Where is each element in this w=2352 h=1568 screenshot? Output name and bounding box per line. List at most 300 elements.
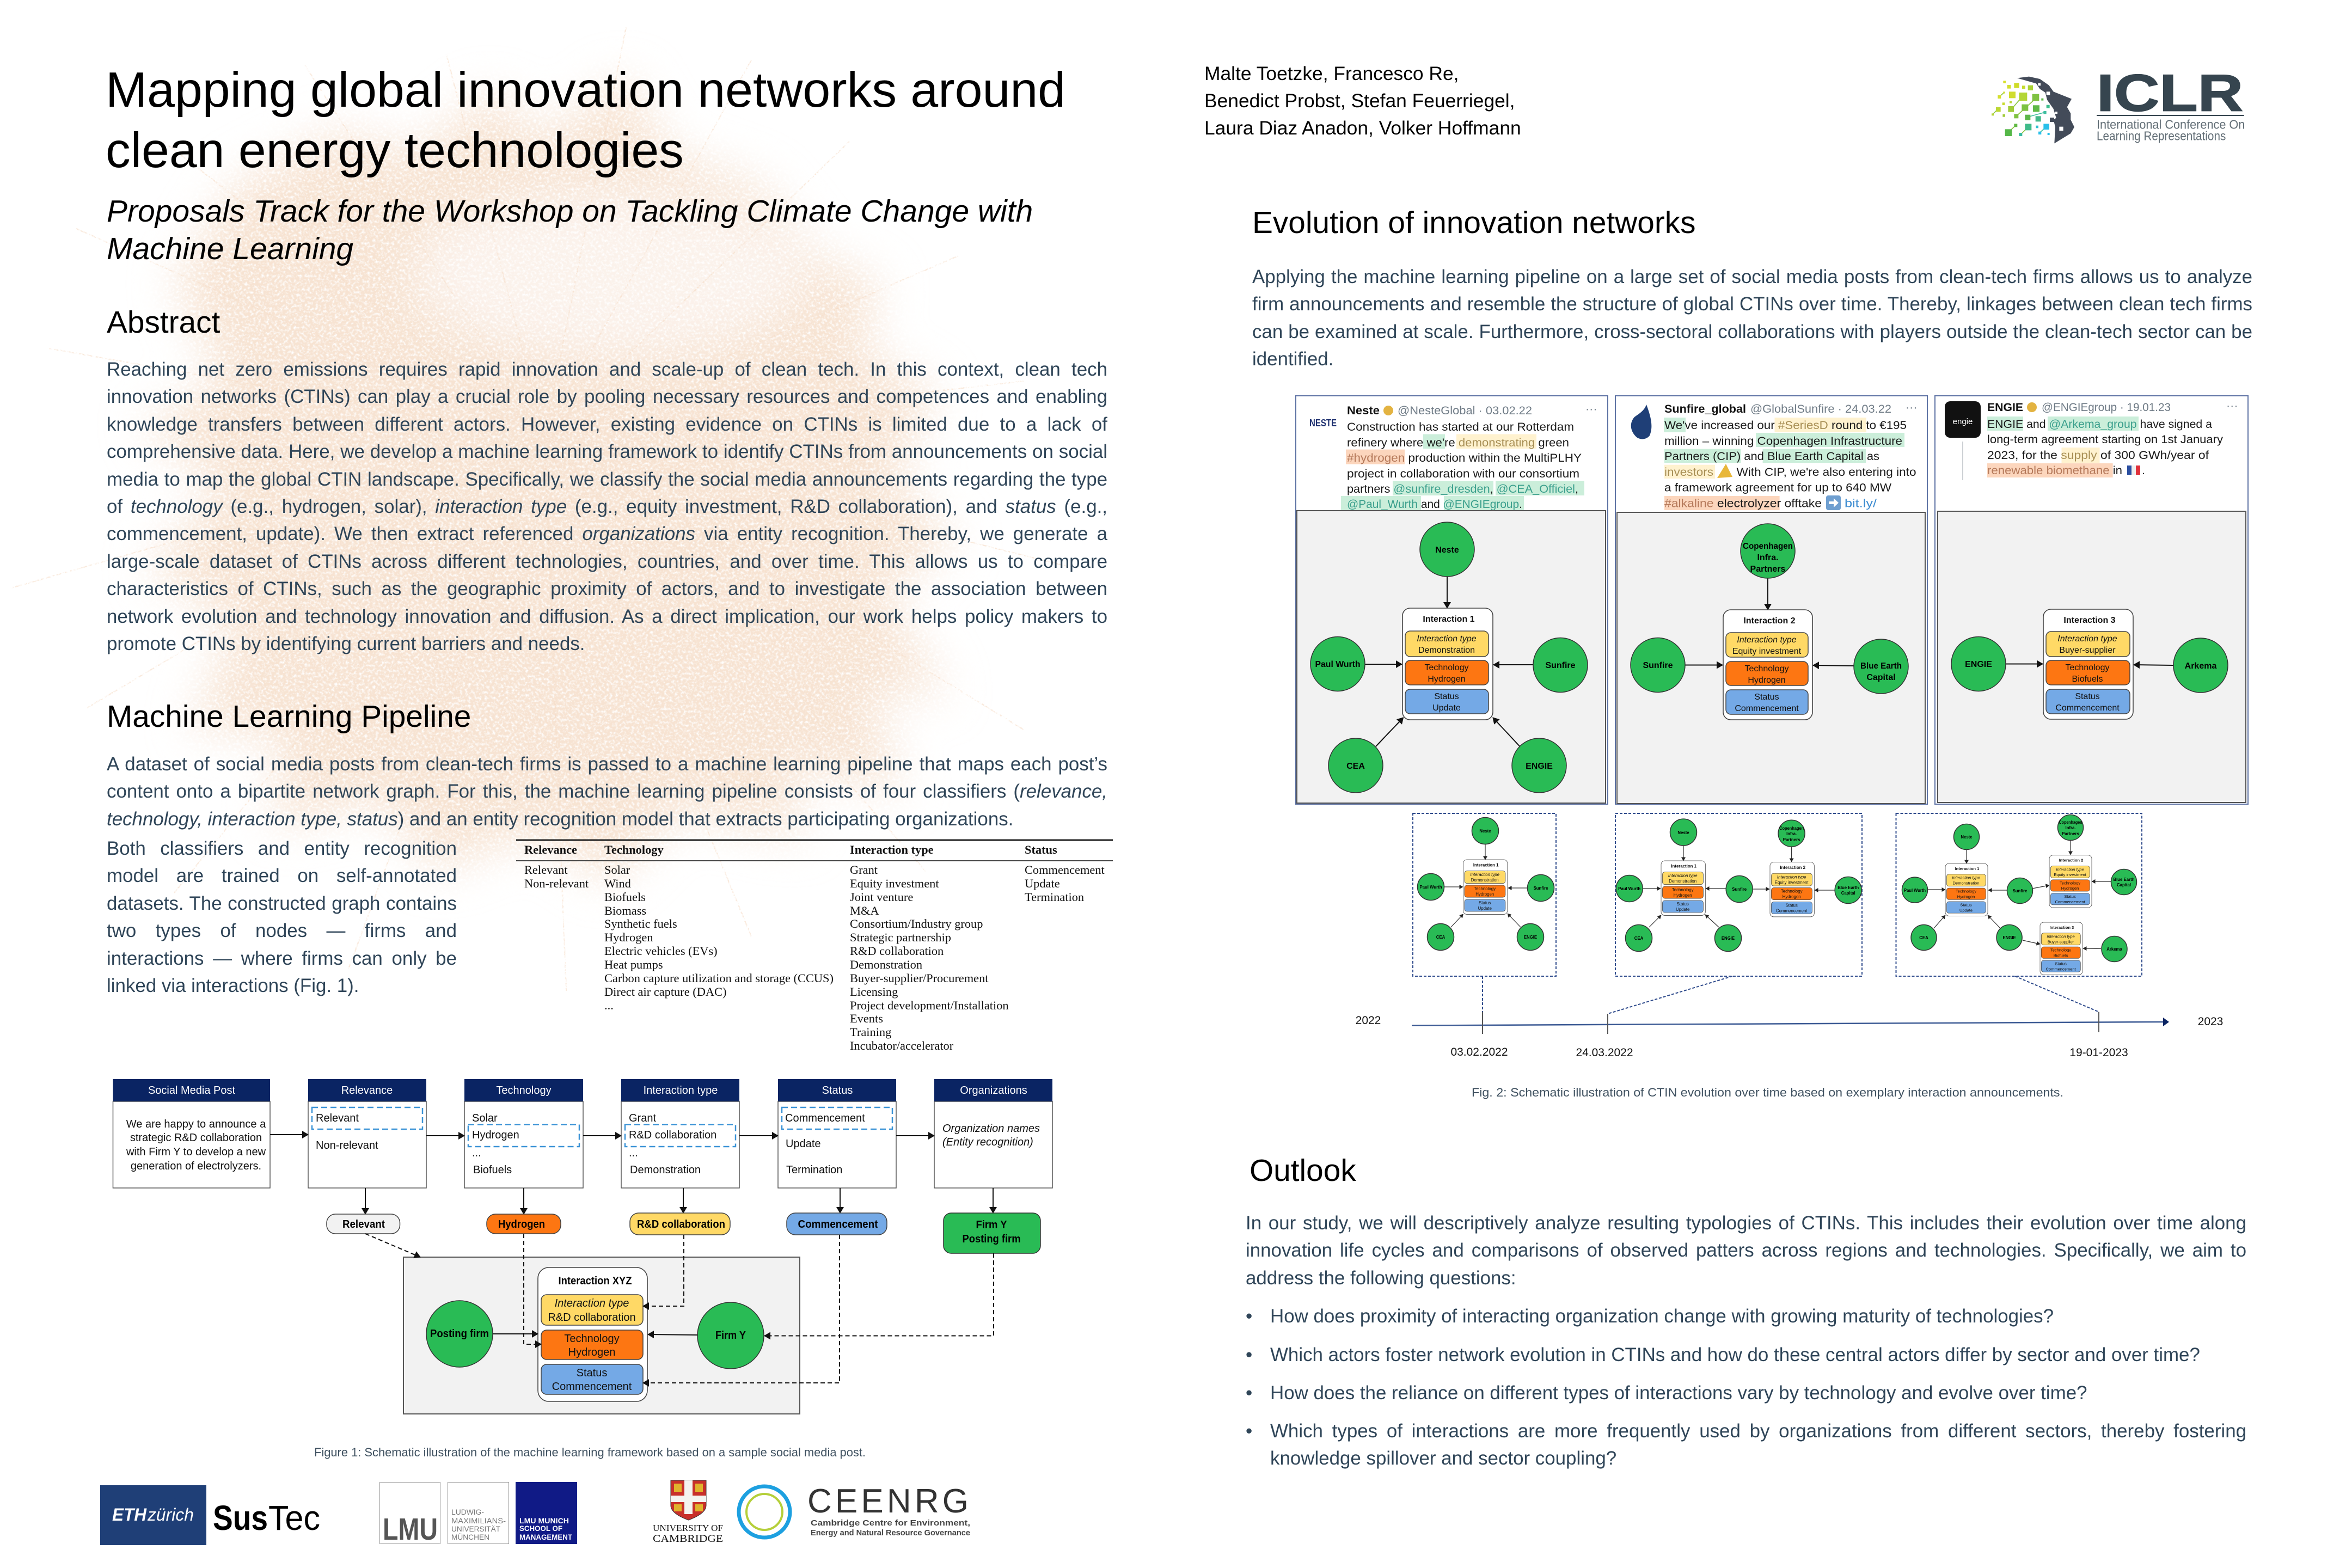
heading: abstract: Abstract <box>107 305 220 340</box>
tweet: Neste: @Paul_Wurth and @ENGIEgroup. <box>1347 498 1522 511</box>
logo: University of Cambridge: UNIVERSITY OF <box>653 1523 723 1533</box>
tweet: Neste <box>1309 402 1597 511</box>
evolution text: Applying the machine learning pipeline on a large set of social media posts from clean-tech firms allows us to analyze <box>1252 266 2252 287</box>
abstract text: innovation networks (CTINs) can play a crucial role by pooling necessary resources and competences and enabling <box>107 386 1107 407</box>
interaction 1: Update <box>1432 703 1461 713</box>
table: classifier categories: Relevant <box>524 863 568 877</box>
caption: figure 1: Figure 1: Schematic illustration of the machine learning framework based on a sample social media post. <box>314 1445 866 1459</box>
table: classifier categories: Incubator/accelerator <box>850 1039 954 1052</box>
interaction node: Hydrogen <box>568 1346 615 1358</box>
subtitle: Proposals Track for the Workshop on Tackling Climate Change with <box>107 194 1033 229</box>
abstract text: knowledge transfers between different actors. However, existing evidence on CTINs is limited due to a lack of <box>107 414 1107 435</box>
outlook question 2: • <box>1246 1344 1252 1365</box>
table: classifier categories: Events <box>850 1012 883 1025</box>
interaction 3: Interaction type <box>2057 634 2117 644</box>
table: classifier categories: Wind <box>604 877 631 890</box>
tweet: Sunfire: With CIP, we're also entering into <box>1737 465 1916 479</box>
snapshot: 24.03.2022: Capital <box>1841 891 1855 896</box>
abstract text: characteristics of CTINs, such as the geographic proximity of actors, and to investigate the association between <box>107 578 1107 599</box>
abstract text: large-scale dataset of CTINs across different technologies, countries, and over time. This allows us to compare <box>107 551 1107 572</box>
outlook question 1 <box>1246 1303 2246 1330</box>
output: hydrogen: Hydrogen <box>498 1218 545 1230</box>
arrows: pipeline flow <box>270 1135 993 1214</box>
snapshot: 19-01-2023: Hydrogen <box>1957 894 1975 899</box>
nodes: ENGIE <box>1965 660 1992 669</box>
interaction 3: Commencement <box>2055 703 2120 713</box>
snapshot: 24.03.2022: Interaction type <box>1777 874 1806 879</box>
snapshot: 24.03.2022: Status <box>1786 903 1798 908</box>
tweet: Neste: NESTE <box>1309 418 1337 428</box>
logo: LMU Munich: MÜNCHEN <box>451 1532 489 1541</box>
table: classifier categories: Consortium/Industry group <box>850 917 983 930</box>
nodes: Sunfire <box>1545 661 1576 670</box>
snapshot: 24.03.2022: Technology <box>1781 889 1803 893</box>
snapshot: 19-01-2023: Buyer-supplier <box>2048 940 2074 945</box>
interaction 1: Interaction type <box>1417 634 1477 644</box>
tweet: Sunfire <box>1664 401 1917 510</box>
output: R&D collaboration: R&D collaboration <box>637 1218 725 1230</box>
logo: LMU Munich: LMU <box>383 1512 438 1547</box>
panel: Sunfire tweet and interaction 2 <box>1615 396 1927 804</box>
panel: status classifier: Commencement <box>785 1112 865 1124</box>
interaction 3: Interaction 3 <box>2063 616 2116 625</box>
snapshot: 03.02.2022: Technology <box>1474 886 1496 891</box>
panel: technology classifier: Biofuels <box>473 1164 512 1176</box>
table: classifier categories: Heat pumps <box>604 958 663 971</box>
snapshot: 19-01-2023: Interaction 2 <box>2059 857 2083 862</box>
snapshot: 03.02.2022: Hydrogen <box>1475 892 1494 897</box>
interaction 1: Demonstration <box>1418 646 1475 655</box>
abstract text: of technology (e.g., hydrogen, solar), interaction type (e.g., equity investment, R&D collaboration), and status (e.g., <box>107 496 1107 517</box>
snapshot: 19-01-2023: Technology <box>1956 889 1976 894</box>
logo: ETH Zurich SusTec: Tec <box>268 1498 320 1538</box>
interaction node: Status <box>577 1367 607 1379</box>
snapshot: 03.02.2022 <box>1413 813 1556 976</box>
tweet: Sunfire: @GlobalSunfire · 24.03.22 <box>1750 402 1891 415</box>
tweet: ENGIE: . <box>2142 464 2145 477</box>
interaction 1: Status <box>1434 692 1459 701</box>
outlook question 2: Which actors foster network evolution in CTINs and how do these central actors differ by sector and over time? <box>1270 1344 2200 1365</box>
snapshot: 19-01-2023: Demonstration <box>1953 881 1980 886</box>
pipeline side text: Both classifiers and entity recognition <box>107 838 457 859</box>
table: classifier categories: Joint venture <box>850 890 913 904</box>
pipeline side text: two types of nodes — firms and <box>107 920 457 941</box>
node: firm Y: Firm Y <box>715 1330 746 1342</box>
panel: technology classifier: ... <box>472 1147 481 1159</box>
nodes <box>1631 524 1908 694</box>
snapshot: 24.03.2022: Interaction 1 <box>1671 863 1697 868</box>
tweet highlights <box>1987 416 2139 477</box>
table: classifier categories: Non-relevant <box>524 877 589 890</box>
nodes: Sunfire <box>1643 661 1673 670</box>
snapshot: 24.03.2022: Interaction type <box>1668 873 1698 878</box>
snapshot: 24.03.2022: Partners <box>1783 837 1800 842</box>
tweet: Sunfire: million – winning Copenhagen Infrastructure <box>1664 434 1902 448</box>
logo: LMU Munich: LUDWIG- <box>451 1508 484 1516</box>
table: classifier categories: Biomass <box>604 904 646 917</box>
tweet and network panels <box>1290 392 2254 808</box>
snapshot: 19-01-2023: Technology <box>2050 948 2071 953</box>
snapshot: 19-01-2023: Interaction type <box>2056 867 2084 872</box>
figure 1: machine learning pipeline diagram <box>112 1079 1053 1414</box>
snapshot: 19-01-2023: Sunfire <box>2013 889 2028 893</box>
logo: ETH Zurich SusTec: zürich <box>147 1505 194 1524</box>
nodes: Arkema <box>2185 661 2216 671</box>
pipeline side text: interactions — where firms can only be <box>107 948 457 969</box>
timeline: 03.02.2022 <box>1450 1046 1508 1058</box>
snapshot: 19-01-2023: Hydrogen <box>2061 886 2079 891</box>
interaction node: R&D collaboration <box>548 1312 636 1324</box>
table: classifier categories: Synthetic fuels <box>604 917 677 930</box>
evolution text <box>1252 264 2252 373</box>
output: hydrogen <box>487 1214 561 1234</box>
table: classifier categories: Equity investment <box>850 877 939 890</box>
icon: head silhouette <box>2017 77 2074 143</box>
abstract text <box>107 359 1107 654</box>
outlook text: address the following questions: <box>1246 1267 1516 1289</box>
table: classifier categories: Project development/Installation <box>850 999 1009 1012</box>
background: peach splatter <box>11 27 1067 991</box>
subtitle <box>107 194 1033 266</box>
authors: Benedict Probst, Stefan Feuerriegel, <box>1204 90 1515 112</box>
panel: social media post <box>113 1079 270 1188</box>
snapshot: 24.03.2022: Interaction 2 <box>1780 865 1806 870</box>
snapshot: 19-01-2023: Neste <box>1961 835 1973 840</box>
snapshot: 19-01-2023 <box>1896 813 2142 976</box>
panel: relevance classifier: Relevance <box>341 1085 393 1097</box>
table: classifier categories: Strategic partnership <box>850 930 951 944</box>
interaction 3 <box>2043 609 2133 719</box>
nodes: Neste <box>1435 546 1459 555</box>
tweet: ENGIE: renewable biomethane in <box>1987 464 2122 477</box>
interaction 2: Hydrogen <box>1748 676 1786 685</box>
output: firm Y posting firm <box>944 1213 1040 1253</box>
table: classifier categories: R&D collaboration <box>850 944 944 958</box>
logo: University of Cambridge: CAMBRIDGE <box>653 1533 723 1545</box>
output: commencement <box>787 1213 887 1235</box>
abstract text: network evolution and technology innovation and diffusion. As a direct implication, our work helps policy makers to <box>107 606 1107 627</box>
subtitle: Machine Learning <box>107 231 353 266</box>
tweet: Neste: Construction has started at our Rotterdam <box>1347 420 1574 433</box>
snapshot: 19-01-2023: Interaction 3 <box>2050 925 2074 930</box>
authors <box>1204 60 1521 142</box>
tweet: Neste: partners @sunfire_dresden, @CEA_Officiel, <box>1347 482 1578 495</box>
snapshot: 03.02.2022: ENGIE <box>1524 935 1537 940</box>
output: commencement: Commencement <box>798 1218 878 1230</box>
panel: organizations: Organizations <box>960 1085 1027 1097</box>
nodes: Capital <box>1866 673 1896 682</box>
logo: CEENRG: Energy and Natural Resource Governance <box>811 1528 970 1538</box>
panel: organizations: (Entity recognition) <box>942 1136 1033 1148</box>
interaction 3: Technology <box>2066 663 2109 672</box>
tweet: ENGIE: @ENGIEgroup · 19.01.23 <box>2042 401 2171 414</box>
snapshot: 19-01-2023: Biofuels <box>2054 953 2068 958</box>
logo: ETH Zurich SusTec <box>98 1481 327 1549</box>
panel: relevance classifier: Non-relevant <box>316 1140 378 1152</box>
snapshot: 19-01-2023: Update <box>1959 908 1973 912</box>
panel: interaction type classifier: Grant <box>629 1112 656 1124</box>
tweet: Sunfire: Partners (CIP) and Blue Earth Capital as <box>1664 450 1879 463</box>
panel: status classifier: Termination <box>786 1164 842 1176</box>
pipeline intro text: technology, interaction type, status) and an entity recognition model that extracts participating organizations. <box>107 808 1013 830</box>
snapshot: 03.02.2022: Demonstration <box>1471 878 1499 883</box>
interaction 2: Technology <box>1745 664 1788 673</box>
panel: social media post: Social Media Post <box>148 1085 235 1097</box>
table: classifier categories: Licensing <box>850 985 898 999</box>
snapshot: 24.03.2022: ENGIE <box>1722 936 1735 941</box>
panel: status classifier: Status <box>822 1085 853 1097</box>
timeline: 24.03.2022 <box>1576 1046 1633 1059</box>
pipeline side text: datasets. The constructed graph contains <box>107 893 457 914</box>
evolution text: identified. <box>1252 348 1333 370</box>
outlook question 4: knowledge spillover and sector coupling? <box>1270 1448 1616 1469</box>
logo: LMU Munich <box>376 1478 583 1548</box>
output: relevant <box>327 1214 400 1234</box>
panel: relevance classifier <box>308 1079 426 1188</box>
panel: technology classifier: Technology <box>496 1085 552 1097</box>
tweet highlights <box>1664 418 1904 510</box>
nodes <box>1310 522 1588 793</box>
interaction 2: Equity investment <box>1732 647 1802 656</box>
arrows <box>1365 577 1533 746</box>
heading: outlook: Outlook <box>1250 1154 1356 1188</box>
interaction 2: Commencement <box>1735 704 1799 713</box>
icon: ENGIE avatar: engie <box>1953 417 1973 426</box>
authors: Laura Diaz Anadon, Volker Hoffmann <box>1204 117 1521 139</box>
snapshot: 24.03.2022: Equity investment <box>1775 880 1809 885</box>
logo: LMU Munich: MAXIMILIANS- <box>451 1516 506 1525</box>
pipeline intro text: A dataset of social media posts from clean-tech firms is passed to a machine learning pipeline that maps each post’s <box>107 754 1107 775</box>
outlook question 4: Which types of interactions are more frequently used by organizations from different sectors, thereby fostering <box>1270 1420 2246 1442</box>
arrows: assignment into graph <box>365 1234 994 1383</box>
snapshot: 24.03.2022: CEA <box>1634 936 1644 941</box>
logo: ICLR: International Conference On <box>2097 118 2245 132</box>
tweet: Neste: project in collaboration with our consortium <box>1347 467 1579 480</box>
logo: ETH Zurich SusTec: Sus <box>213 1498 268 1538</box>
pipeline side text <box>107 838 457 996</box>
nodes: Blue Earth <box>1860 661 1902 671</box>
abstract text: comprehensive data. Here, we develop a machine learning framework to identify CTINs from announcements on social <box>107 441 1107 462</box>
outlook question 1: How does proximity of interacting organization change with growing maturity of technologies? <box>1270 1306 2054 1327</box>
snapshot: 19-01-2023: Equity investment <box>2054 872 2087 877</box>
snapshot: 19-01-2023: Paul Wurth <box>1904 888 1926 893</box>
panel: interaction type classifier: Interaction type <box>644 1085 718 1097</box>
outlook question 3: • <box>1246 1382 1252 1404</box>
panel: interaction type classifier <box>621 1079 739 1188</box>
interaction 1: Technology <box>1425 663 1468 672</box>
evolution text: firm announcements and resemble the structure of global CTINs over time. Thereby, linkages between clean tech firms <box>1252 293 2252 315</box>
snapshot: 24.03.2022: Status <box>1677 902 1689 906</box>
snapshot: 24.03.2022: Blue Earth <box>1837 885 1859 890</box>
table: classifier categories: Relevance <box>524 843 577 856</box>
logo: LMU Munich: LMU MUNICH <box>519 1516 569 1525</box>
panel: interaction type classifier: Demonstration <box>630 1164 701 1176</box>
snapshot: 19-01-2023: ENGIE <box>2002 935 2016 940</box>
panel: interaction type classifier: R&D collaboration <box>629 1129 716 1141</box>
nodes: ENGIE <box>1526 762 1553 771</box>
logo: LMU Munich: UNIVERSITÄT <box>451 1524 500 1533</box>
table: classifier categories <box>516 840 1113 1052</box>
icon: ENGIE avatar <box>1945 401 1981 480</box>
interaction 1: Interaction 1 <box>1423 615 1475 624</box>
panel: technology classifier: Hydrogen <box>472 1129 519 1141</box>
nodes: Copenhagen <box>1743 542 1793 551</box>
snapshot: 24.03.2022: Infra. <box>1786 831 1797 836</box>
snapshot: 24.03.2022: Paul Wurth <box>1618 886 1640 891</box>
snapshot: 03.02.2022: Interaction type <box>1470 872 1500 877</box>
title: clean energy technologies <box>106 122 684 178</box>
tweet: Neste: Neste <box>1347 404 1380 417</box>
tweet: Neste: @NesteGlobal · 03.02.22 <box>1398 404 1532 417</box>
interaction 1 <box>1402 608 1493 720</box>
snapshot: 19-01-2023: Interaction 1 <box>1955 866 1979 871</box>
heading: machine learning pipeline: Machine Learning Pipeline <box>107 700 471 734</box>
snapshot: 03.02.2022: CEA <box>1436 935 1445 940</box>
snapshot: 03.02.2022: Interaction 1 <box>1473 862 1499 867</box>
nodes: Infra. <box>1757 553 1779 562</box>
snapshot: 19-01-2023: Partners <box>2062 831 2079 836</box>
panel: technology classifier <box>464 1079 583 1188</box>
interaction 3: Biofuels <box>2072 675 2103 684</box>
outlook text <box>1246 1210 2246 1292</box>
tweet: Sunfire: investors <box>1664 465 1713 479</box>
snapshot: 03.02.2022: Paul Wurth <box>1419 885 1442 890</box>
logo: CEENRG: CEENRG <box>807 1483 969 1520</box>
interaction 1: Hydrogen <box>1428 675 1466 684</box>
snapshot: 19-01-2023: Commencement <box>2045 966 2077 971</box>
tweet: Sunfire: Sunfire_global <box>1664 402 1746 415</box>
logo: CEENRG <box>732 1481 975 1541</box>
snapshot: 19-01-2023: Technology <box>2060 880 2080 885</box>
output: relevant: Relevant <box>342 1218 385 1230</box>
title: Mapping global innovation networks around <box>106 62 1065 118</box>
logo: CEENRG: Cambridge Centre for Environment, <box>811 1518 970 1528</box>
table: classifier categories: Demonstration <box>850 958 922 971</box>
interaction node: Technology <box>564 1333 620 1345</box>
tweet highlights <box>1341 434 1584 511</box>
heading: evolution of innovation networks: Evolution of innovation networks <box>1252 206 1696 240</box>
panel: interaction type classifier: ... <box>629 1147 638 1159</box>
interaction node <box>538 1267 647 1401</box>
snapshot: 24.03.2022 <box>1615 813 1862 976</box>
table: classifier categories: Buyer-supplier/Procurement <box>850 971 989 985</box>
table: classifier categories: Solar <box>604 863 630 877</box>
panel: relevance classifier: Relevant <box>316 1112 359 1124</box>
interaction node: Commencement <box>552 1381 632 1393</box>
tweet: ENGIE: ENGIE <box>1987 401 2023 414</box>
outlook question 4 <box>1246 1418 2246 1473</box>
output: firm Y posting firm: Posting firm <box>963 1233 1020 1245</box>
logo: LMU Munich: MANAGEMENT <box>519 1533 572 1541</box>
tweet: ENGIE: long-term agreement starting on 1st January <box>1987 433 2223 446</box>
node: posting firm: Posting firm <box>430 1328 489 1340</box>
logo: ICLR: Learning Representations <box>2097 128 2226 143</box>
snapshot: 03.02.2022: Neste <box>1479 829 1491 834</box>
pipeline intro text <box>107 754 1107 830</box>
node: posting firm <box>426 1301 493 1367</box>
snapshot: 03.02.2022: Update <box>1478 906 1492 911</box>
output: firm Y posting firm: Firm Y <box>976 1219 1007 1231</box>
outlook question 3 <box>1246 1380 2246 1407</box>
interaction node: Interaction type <box>555 1297 629 1309</box>
panel: social media post: generation of electrolyzers. <box>131 1160 261 1172</box>
outlook text: innovation life cycles and comparisons of observed patters across regions and technologies. Specifically, we aim to <box>1246 1240 2246 1261</box>
snapshot: 19-01-2023: Infra. <box>2065 825 2076 830</box>
panel: ENGIE tweet and interaction 3 <box>1935 396 2248 804</box>
outlook text: In our study, we will descriptively analyze resulting typologies of CTINs. This includes their evolution over time along <box>1246 1212 2246 1234</box>
table: classifier categories: Update <box>1025 877 1060 890</box>
tweet: Neste: refinery where we're demonstrating green <box>1347 436 1569 449</box>
snapshot: 24.03.2022: Neste <box>1677 830 1689 835</box>
nodes: Paul Wurth <box>1315 660 1360 669</box>
table: classifier categories: Grant <box>850 863 878 877</box>
icon: data pixels <box>1992 81 2063 136</box>
snapshot: 19-01-2023: Commencement <box>2055 899 2086 904</box>
panel: social media post: with Firm Y to develop a new <box>126 1146 266 1158</box>
snapshot: 03.02.2022: Status <box>1479 901 1491 905</box>
pipeline side text: model are trained on self-annotated <box>107 865 457 886</box>
table: classifier categories: Status <box>1025 843 1057 856</box>
interaction 3: Buyer-supplier <box>2059 646 2116 655</box>
snapshot: 24.03.2022: Technology <box>1672 887 1694 892</box>
table: classifier categories: ... <box>604 999 614 1012</box>
table: classifier categories: Technology <box>604 843 664 856</box>
snapshot: 19-01-2023: Arkema <box>2106 947 2122 952</box>
abstract text: Reaching net zero emissions requires rapid innovation and scale-up of clean tech. In this context, clean tech <box>107 359 1107 380</box>
outlook question 3: How does the reliance on different types of interactions vary by technology and evolve over time? <box>1270 1382 2087 1404</box>
table: classifier categories: Termination <box>1025 890 1084 904</box>
outlook question 1: • <box>1246 1306 1252 1327</box>
panel: social media post: We are happy to announce a <box>126 1118 266 1130</box>
snapshot: 19-01-2023: Status <box>1960 902 1972 907</box>
snapshot: 24.03.2022: Sunfire <box>1732 887 1747 892</box>
tweet: ENGIE: 2023, for the supply of 300 GWh/year of <box>1987 449 2209 462</box>
table: classifier categories: Interaction type <box>850 843 934 856</box>
interaction 3: Status <box>2075 692 2100 701</box>
snapshot: 24.03.2022: Hydrogen <box>1674 893 1692 898</box>
authors: Malte Toetzke, Francesco Re, <box>1204 63 1459 84</box>
interaction node: Interaction XYZ <box>559 1275 632 1287</box>
logo: University of Cambridge <box>651 1478 727 1545</box>
tweet: Sunfire: We've increased our #SeriesD round to €195 <box>1664 419 1907 432</box>
snapshot: 19-01-2023: Blue Earth <box>2114 877 2135 882</box>
table: classifier categories: Commencement <box>1025 863 1105 877</box>
tweet: ENGIE: ENGIE and @Arkema_group have signed a <box>1987 418 2212 431</box>
snapshot: 19-01-2023: CEA <box>1919 935 1928 940</box>
panel: organizations <box>934 1079 1052 1188</box>
logo: ICLR <box>1982 65 2254 152</box>
snapshot: 19-01-2023: Copenhagen <box>2059 820 2082 825</box>
panel: status classifier: Update <box>786 1138 821 1150</box>
pipeline intro text: content onto a bipartite network graph. For this, the machine learning pipeline consists of four classifiers (relevance, <box>107 781 1107 802</box>
tweet: Sunfire: bit.ly/ <box>1845 497 1877 510</box>
panel: social media post: strategic R&D collaboration <box>130 1132 262 1144</box>
table: classifier categories: Electric vehicles (EVs) <box>604 944 718 958</box>
title <box>106 62 1065 178</box>
node: firm Y <box>697 1302 764 1369</box>
nodes: Partners <box>1750 565 1786 574</box>
snapshot: 24.03.2022: Copenhagen <box>1779 826 1804 831</box>
snapshot: 24.03.2022: Hydrogen <box>1783 895 1801 899</box>
snapshot: 03.02.2022: Sunfire <box>1534 886 1548 891</box>
interaction 2: Interaction 2 <box>1743 616 1796 626</box>
pipeline side text: linked via interactions (Fig. 1). <box>107 975 359 996</box>
interaction 2: Status <box>1754 693 1779 702</box>
tweet: Sunfire: a framework agreement for up to 640 MW <box>1664 481 1892 494</box>
tweet: Neste: #hydrogen production within the MultiPLHY <box>1347 451 1582 464</box>
nodes: CEA <box>1346 762 1365 771</box>
panel: technology classifier: Solar <box>472 1112 498 1124</box>
